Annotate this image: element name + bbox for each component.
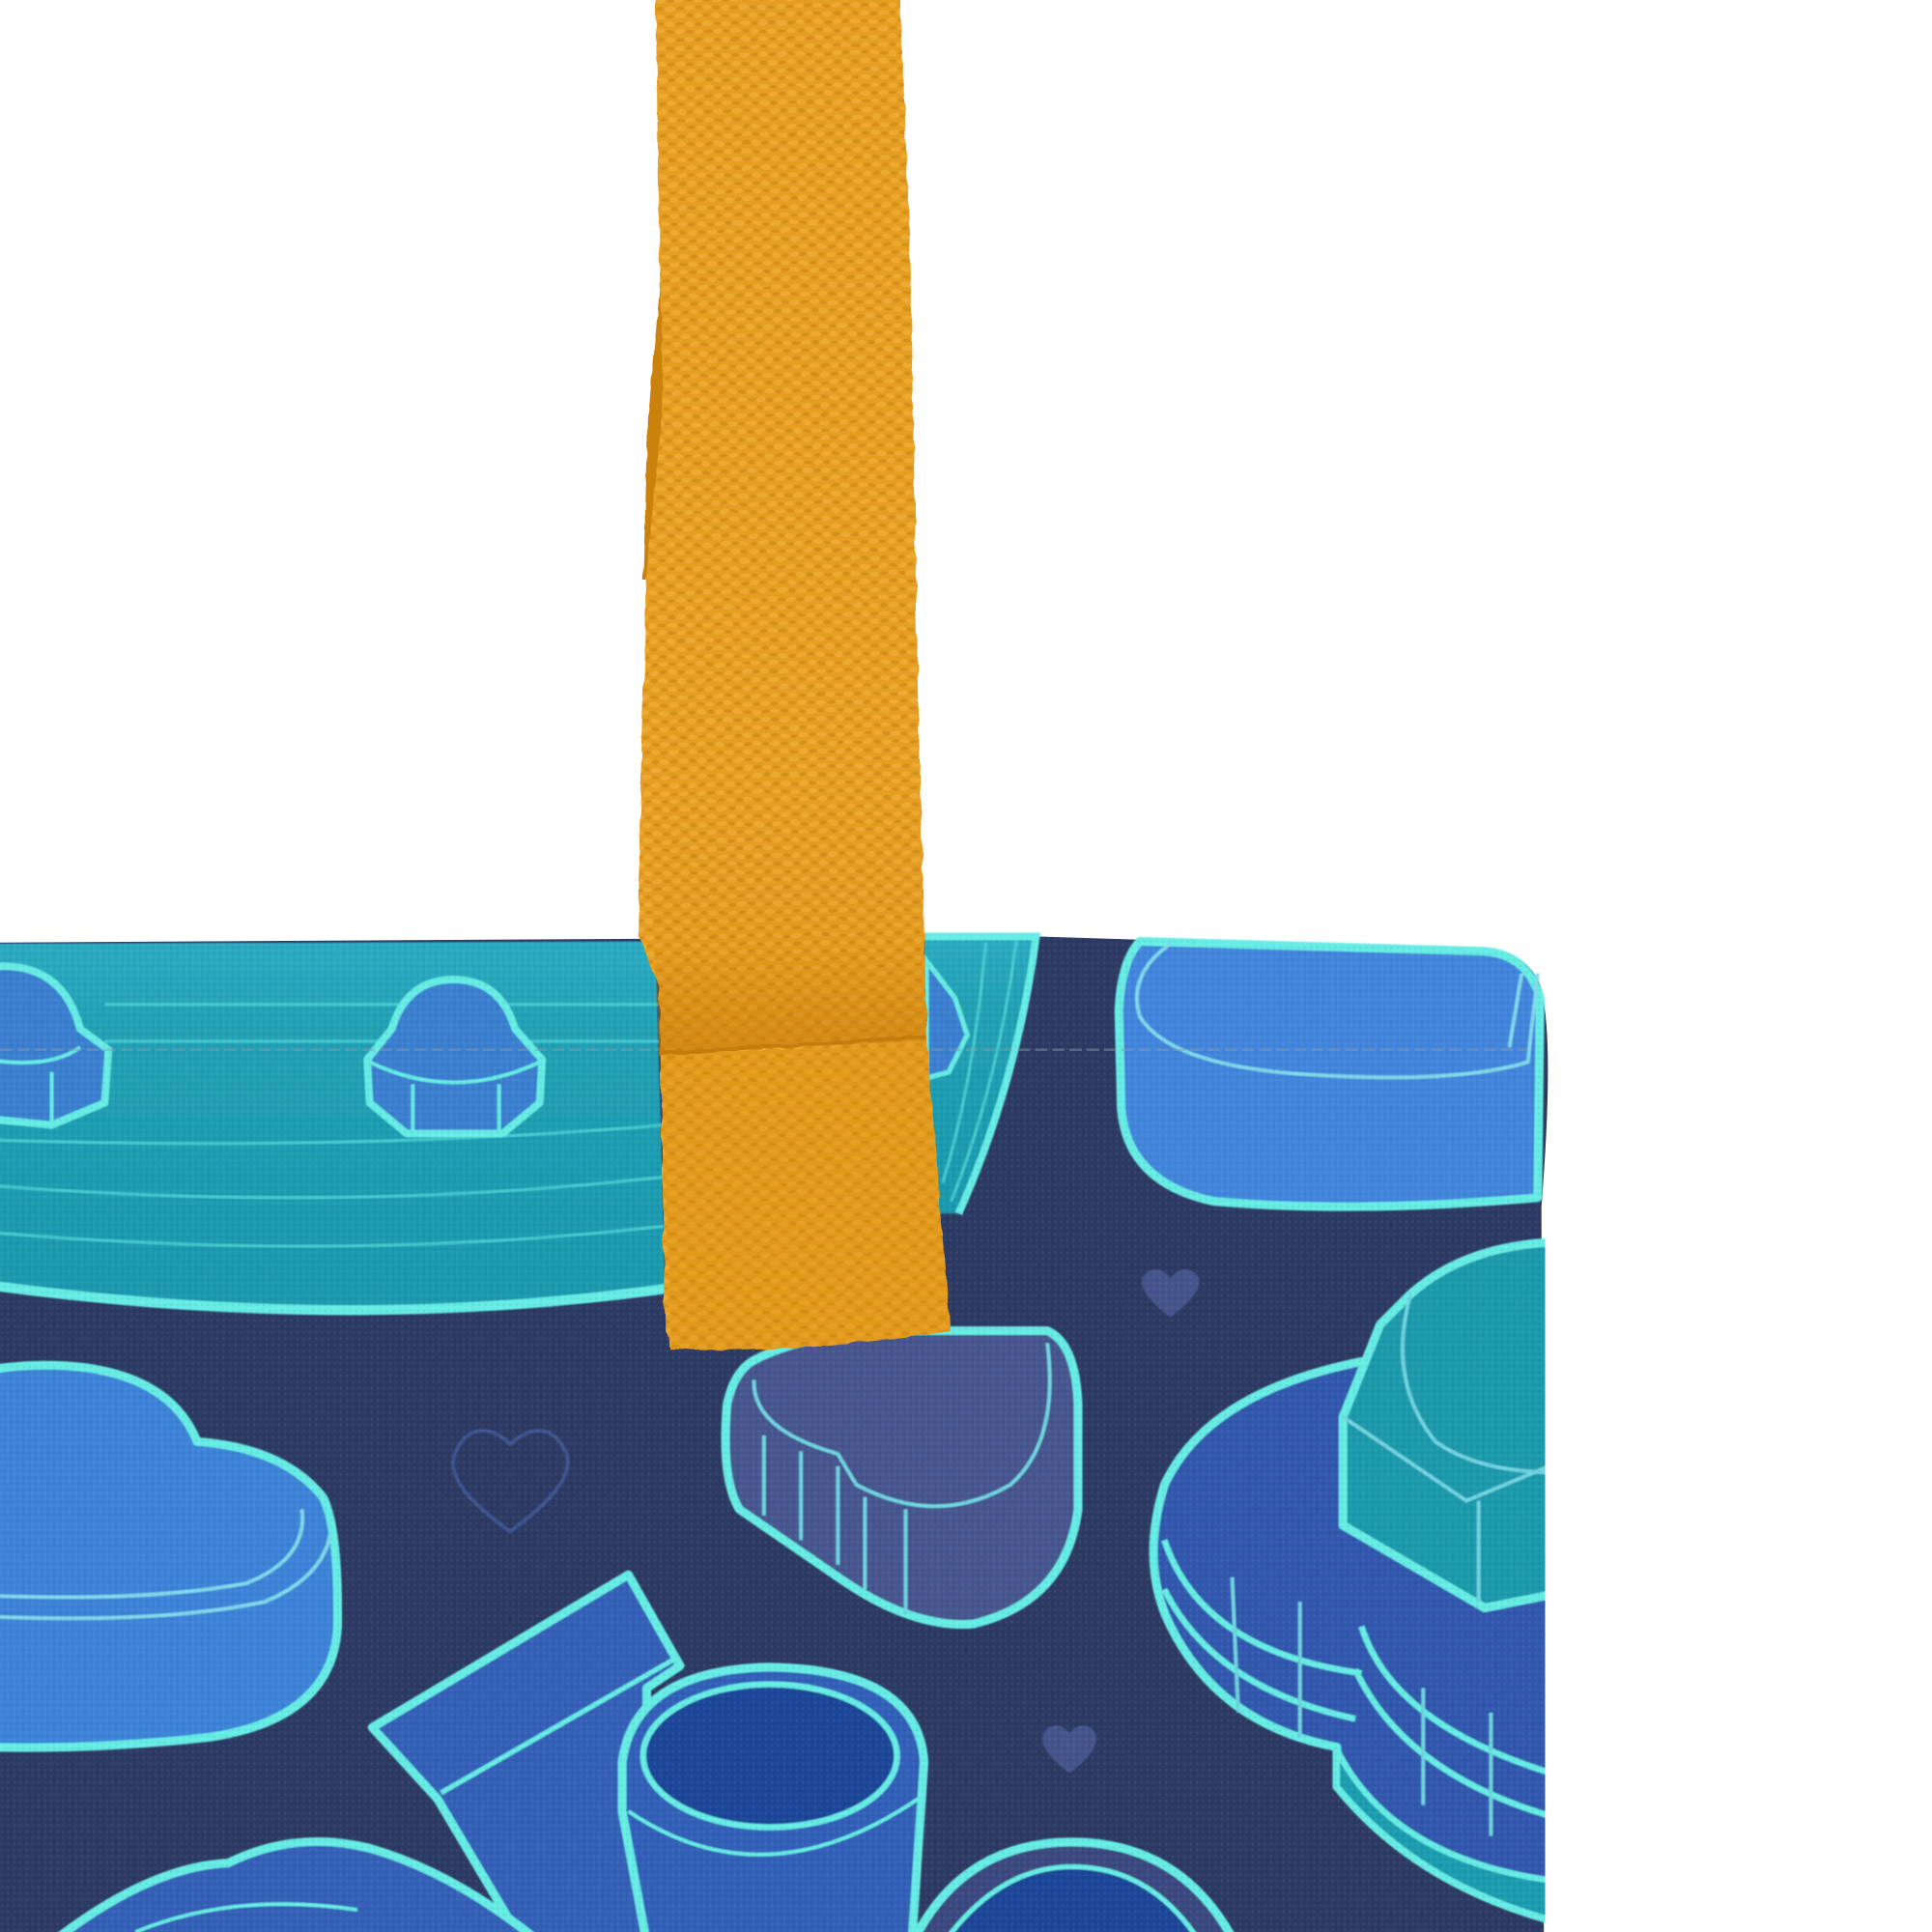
white page edge right of bag — [1545, 1220, 1932, 1932]
printed pattern artwork — [0, 936, 1559, 1932]
icon: outline heart — [453, 1431, 568, 1531]
icon: nut left — [0, 966, 108, 1125]
icon: partial blue shape bottom left — [49, 1841, 542, 1932]
bag body: navy fabric — [0, 936, 1548, 1932]
icon: stacked coins and teal nut right — [1153, 1242, 1559, 1922]
icon: heart-shaped block — [725, 1331, 1078, 1625]
icon: blue cylinder — [622, 1667, 924, 1932]
icon: nut centre — [367, 980, 542, 1133]
icon: blue rounded block top right — [1119, 941, 1540, 1207]
icon: small faint heart — [1042, 1725, 1096, 1773]
icon: blue cloud shape — [0, 1365, 338, 1747]
stitch line along the hem — [0, 1049, 1528, 1051]
icon: blue rectangular block — [372, 1575, 680, 1932]
fabric texture overlay — [0, 936, 1548, 1932]
icon: partial cylinder bottom centre — [912, 1842, 1236, 1932]
orange woven strap — [639, 0, 950, 1350]
icon: faint solid heart — [1142, 1269, 1200, 1318]
teal band with curved lines — [0, 936, 1037, 1311]
icon: nut right of strap — [926, 961, 967, 1078]
